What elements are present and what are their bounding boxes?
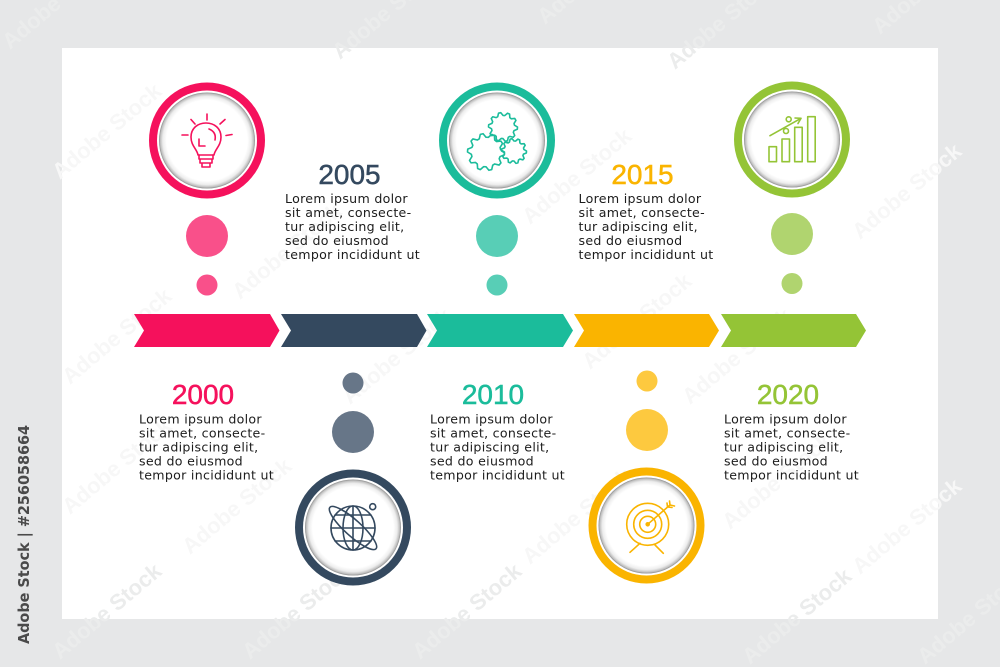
arrow: 2000 — [134, 314, 280, 347]
icon: globe — [325, 501, 381, 555]
year 2020: 2020 — [757, 379, 819, 410]
arrow: 2015 — [574, 314, 719, 347]
text 2015: tur adipiscing elit, — [578, 219, 698, 234]
icon: target — [627, 501, 674, 553]
watermarks: Adobe Stock — [517, 463, 637, 569]
step 2010 medallion — [439, 82, 555, 198]
step 2000 medallion — [149, 82, 265, 198]
watermarks: Adobe Stock — [847, 473, 967, 579]
text 2000 — [139, 412, 274, 482]
watermarks: Adobe Stock — [847, 138, 967, 244]
text 2020: tempor incididunt ut — [724, 468, 859, 482]
watermarks: Adobe Stock — [517, 123, 637, 229]
text 2005: tur adipiscing elit, — [285, 219, 404, 234]
text 2000: tempor incididunt ut — [139, 468, 274, 482]
year 2005: 2005 — [318, 159, 381, 190]
block 2015 — [578, 159, 714, 262]
year 2000: 2000 — [172, 379, 234, 410]
icon: growth chart — [769, 117, 815, 162]
text 2015: Lorem ipsum dolor — [578, 191, 702, 206]
dot small 2020 — [782, 273, 802, 294]
block 2005 — [285, 159, 420, 262]
dot large 2000 — [186, 215, 228, 257]
watermarks: Adobe Stock — [177, 453, 297, 559]
text 2000: Lorem ipsum dolor — [139, 412, 262, 426]
text 2020: sit amet, consecte- — [724, 426, 850, 440]
watermarks: Adobe Stock — [407, 558, 527, 664]
dot small 2010 — [486, 274, 508, 296]
watermarks: Adobe Stock — [677, 303, 797, 409]
text 2010: tempor incididunt ut — [430, 468, 565, 482]
text 2000: sit amet, consecte- — [139, 426, 265, 440]
text 2010: sed do eiusmod — [430, 454, 534, 468]
dot large 2005 — [332, 411, 374, 453]
watermarks: Adobe Stock — [237, 558, 357, 664]
text 2005: Lorem ipsum dolor — [285, 191, 408, 206]
text 2015: sed do eiusmod — [578, 233, 682, 248]
watermarks: Adobe Stock — [577, 268, 697, 374]
watermarks: Adobe Stock — [57, 413, 177, 519]
block 2020 — [724, 379, 859, 482]
text 2010: sit amet, consecte- — [430, 426, 556, 440]
step 2015 medallion — [588, 468, 704, 584]
step 2005 medallion — [295, 470, 411, 586]
watermarks: Adobe Stock — [717, 428, 837, 534]
icon: light bulb — [182, 114, 232, 167]
dot small 2005 — [342, 372, 364, 394]
dot small 2015 — [636, 370, 658, 392]
watermarks: Adobe Stock — [47, 78, 167, 184]
icon: gears — [468, 113, 526, 170]
watermarks: Adobe Stock — [737, 563, 857, 667]
text 2020: sed do eiusmod — [724, 454, 828, 468]
text 2020: Lorem ipsum dolor — [724, 412, 847, 426]
text 2000: tur adipiscing elit, — [139, 440, 258, 454]
text 2005: sit amet, consecte- — [285, 205, 411, 220]
text 2010 — [430, 412, 565, 482]
text 2000: sed do eiusmod — [139, 454, 243, 468]
arrow: 2010 — [427, 314, 573, 347]
timeline arrows — [134, 314, 866, 347]
block 2000 — [139, 379, 274, 482]
arrow: 2020 — [721, 314, 866, 347]
watermarks: Adobe Stock — [227, 198, 347, 304]
text 2005: sed do eiusmod — [285, 233, 389, 248]
step 2020 medallion — [734, 82, 850, 198]
dot small 2000 — [196, 274, 218, 296]
text 2010: Lorem ipsum dolor — [430, 412, 553, 426]
text 2020: tur adipiscing elit, — [724, 440, 843, 454]
arrow: 2005 — [281, 314, 426, 347]
text 2010: tur adipiscing elit, — [430, 440, 549, 454]
stock id vertical text: Adobe Stock | #256058664 — [15, 425, 34, 644]
text 2015 — [578, 191, 714, 262]
text 2005 — [285, 191, 420, 262]
dot large 2020 — [771, 213, 813, 255]
year 2015: 2015 — [611, 159, 674, 190]
watermarks: Adobe Stock — [337, 303, 457, 409]
text 2005: tempor incididunt ut — [285, 247, 420, 262]
text 2020 — [724, 412, 859, 482]
dot large 2015 — [626, 409, 668, 451]
watermarks: Adobe Stock — [57, 283, 177, 389]
watermarks: Adobe Stock — [47, 558, 167, 664]
white panel — [62, 48, 938, 619]
block 2010 — [430, 379, 565, 482]
dot large 2010 — [476, 215, 518, 257]
text 2015: sit amet, consecte- — [578, 205, 705, 220]
text 2015: tempor incididunt ut — [578, 247, 714, 262]
year 2010: 2010 — [462, 379, 524, 410]
